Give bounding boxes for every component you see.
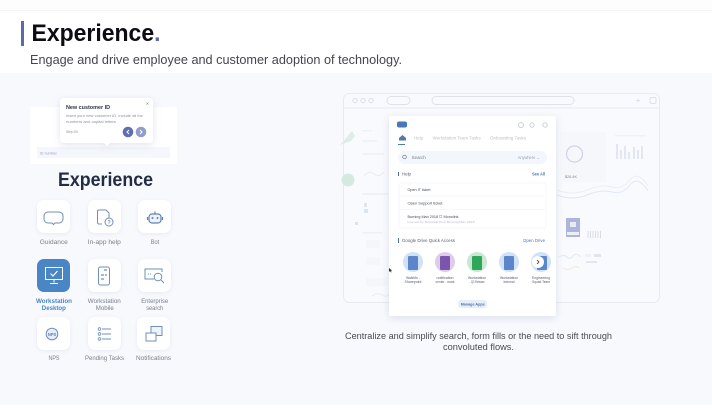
caption: Centralize and simplify search, form fills or the need to sift through <box>345 331 612 341</box>
file: Engineering Squad Team <box>531 252 551 284</box>
file: Workstation Q3 Release <box>467 252 487 284</box>
tooltip: new customer ID: × <box>146 102 149 108</box>
tile: Enterprise search: search <box>146 305 164 312</box>
help section: Burning Man 2018 ☐ Monolink <box>408 214 459 219</box>
manage apps button <box>458 300 487 308</box>
input field: ID number <box>40 152 58 156</box>
file: Engineering Squad Team: Squad Team <box>532 280 550 284</box>
faded dashboard: right side <box>557 132 648 270</box>
file: Workstation Q3 Release: Workstation <box>468 276 486 280</box>
Google Drive quick access section: Google Drive Quick Access <box>402 238 455 243</box>
Google Drive quick access section: Open Drive <box>523 238 546 243</box>
search bar <box>398 151 547 164</box>
tile: Pending Tasks <box>85 317 124 362</box>
tooltip: new customer ID: Insert your new customer ID, include all the <box>66 114 143 118</box>
tile: Enterprise search: Enterprise <box>141 298 169 305</box>
tabs: Onboarding Tasks <box>490 136 527 140</box>
file: WalkMe Sharepoint <box>403 252 423 284</box>
manage apps button: Manage Apps <box>461 302 485 306</box>
tooltip: new customer ID <box>60 98 153 146</box>
tile: Workstation Mobile <box>88 259 121 312</box>
tile: NPS <box>37 317 70 362</box>
file: Workstation Q3 Release: - Q3 Release <box>470 280 485 284</box>
tile: Workstation Desktop (selected): Workstation <box>36 298 72 305</box>
tabs: Help <box>414 136 424 140</box>
faded dashboard: left side <box>340 130 390 296</box>
tile: Pending Tasks: Pending Tasks <box>85 355 124 362</box>
tile: Workstation Mobile: Workstation <box>88 298 121 305</box>
help section: Open Support ticket <box>408 200 443 206</box>
tile: NPS: NPS <box>48 332 57 337</box>
file: notification center mark <box>435 252 455 284</box>
file: Workstation Internal <box>499 252 519 284</box>
file: Workstation Internal: Workstation <box>500 276 518 280</box>
icon grid <box>36 200 171 362</box>
tile: In-app help: ? <box>107 220 111 226</box>
tooltip: new customer ID: New customer ID <box>66 105 110 111</box>
file: Workstation Internal: Internal <box>504 280 515 284</box>
help section: Live set by Monolink from Burning Man 2018 <box>408 220 475 224</box>
caption <box>345 331 612 352</box>
subtitle: Engage and drive employee and customer adoption of technology. <box>30 53 402 67</box>
file: notification center mark: notification <box>436 276 454 280</box>
tile: Notifications: Notifications <box>136 355 171 362</box>
panel header <box>397 122 547 128</box>
help section <box>398 172 546 228</box>
help section: Open IT ticket <box>408 187 431 192</box>
tile: Bot: Bot <box>151 239 159 246</box>
tile: NPS: NPS <box>48 355 60 362</box>
browser window mockup <box>340 94 660 302</box>
input field <box>37 147 170 158</box>
tooltip: new customer ID: numbers and capital letters <box>66 120 116 124</box>
header accent bar <box>21 21 24 46</box>
file: Engineering Squad Team: Engineering <box>532 276 550 280</box>
tooltip: new customer ID: Step 2/5 <box>66 130 78 134</box>
help section: See All <box>532 172 545 176</box>
tile: Notifications <box>136 317 171 362</box>
search bar: Search <box>412 155 426 160</box>
file: WalkMe Sharepoint: WalkMe - <box>406 276 421 280</box>
tile: Enterprise search <box>138 259 171 312</box>
title: Experience. <box>32 20 160 47</box>
tile: Workstation Desktop (selected) <box>36 259 72 312</box>
tile: Guidance: Guidance <box>40 239 68 246</box>
cursor icon <box>389 268 392 272</box>
tile: Workstation Mobile: Mobile <box>96 305 114 312</box>
caption: convoluted flows. <box>443 342 514 352</box>
tile: Guidance <box>37 200 70 246</box>
file: notification center mark: center - mark <box>436 280 455 284</box>
tile: In-app help <box>88 200 121 246</box>
search bar: Anywhere ⌄ <box>518 155 540 160</box>
tile: Workstation Desktop (selected): Desktop <box>42 305 66 312</box>
help section: Help <box>402 172 412 176</box>
tile: In-app help: In-app help <box>88 239 121 246</box>
file: WalkMe Sharepoint: Sharepoint <box>404 280 422 284</box>
tile: Bot <box>138 200 171 246</box>
heading: Experience: Experience <box>58 169 153 191</box>
faded dashboard: right side: $26.4K <box>565 175 578 179</box>
panel: customer ID form preview <box>30 98 177 164</box>
Google Drive quick access section <box>398 238 551 284</box>
tabs <box>398 135 527 145</box>
app launcher panel <box>389 116 556 316</box>
tabs: Workstation Team Tasks <box>433 136 482 140</box>
